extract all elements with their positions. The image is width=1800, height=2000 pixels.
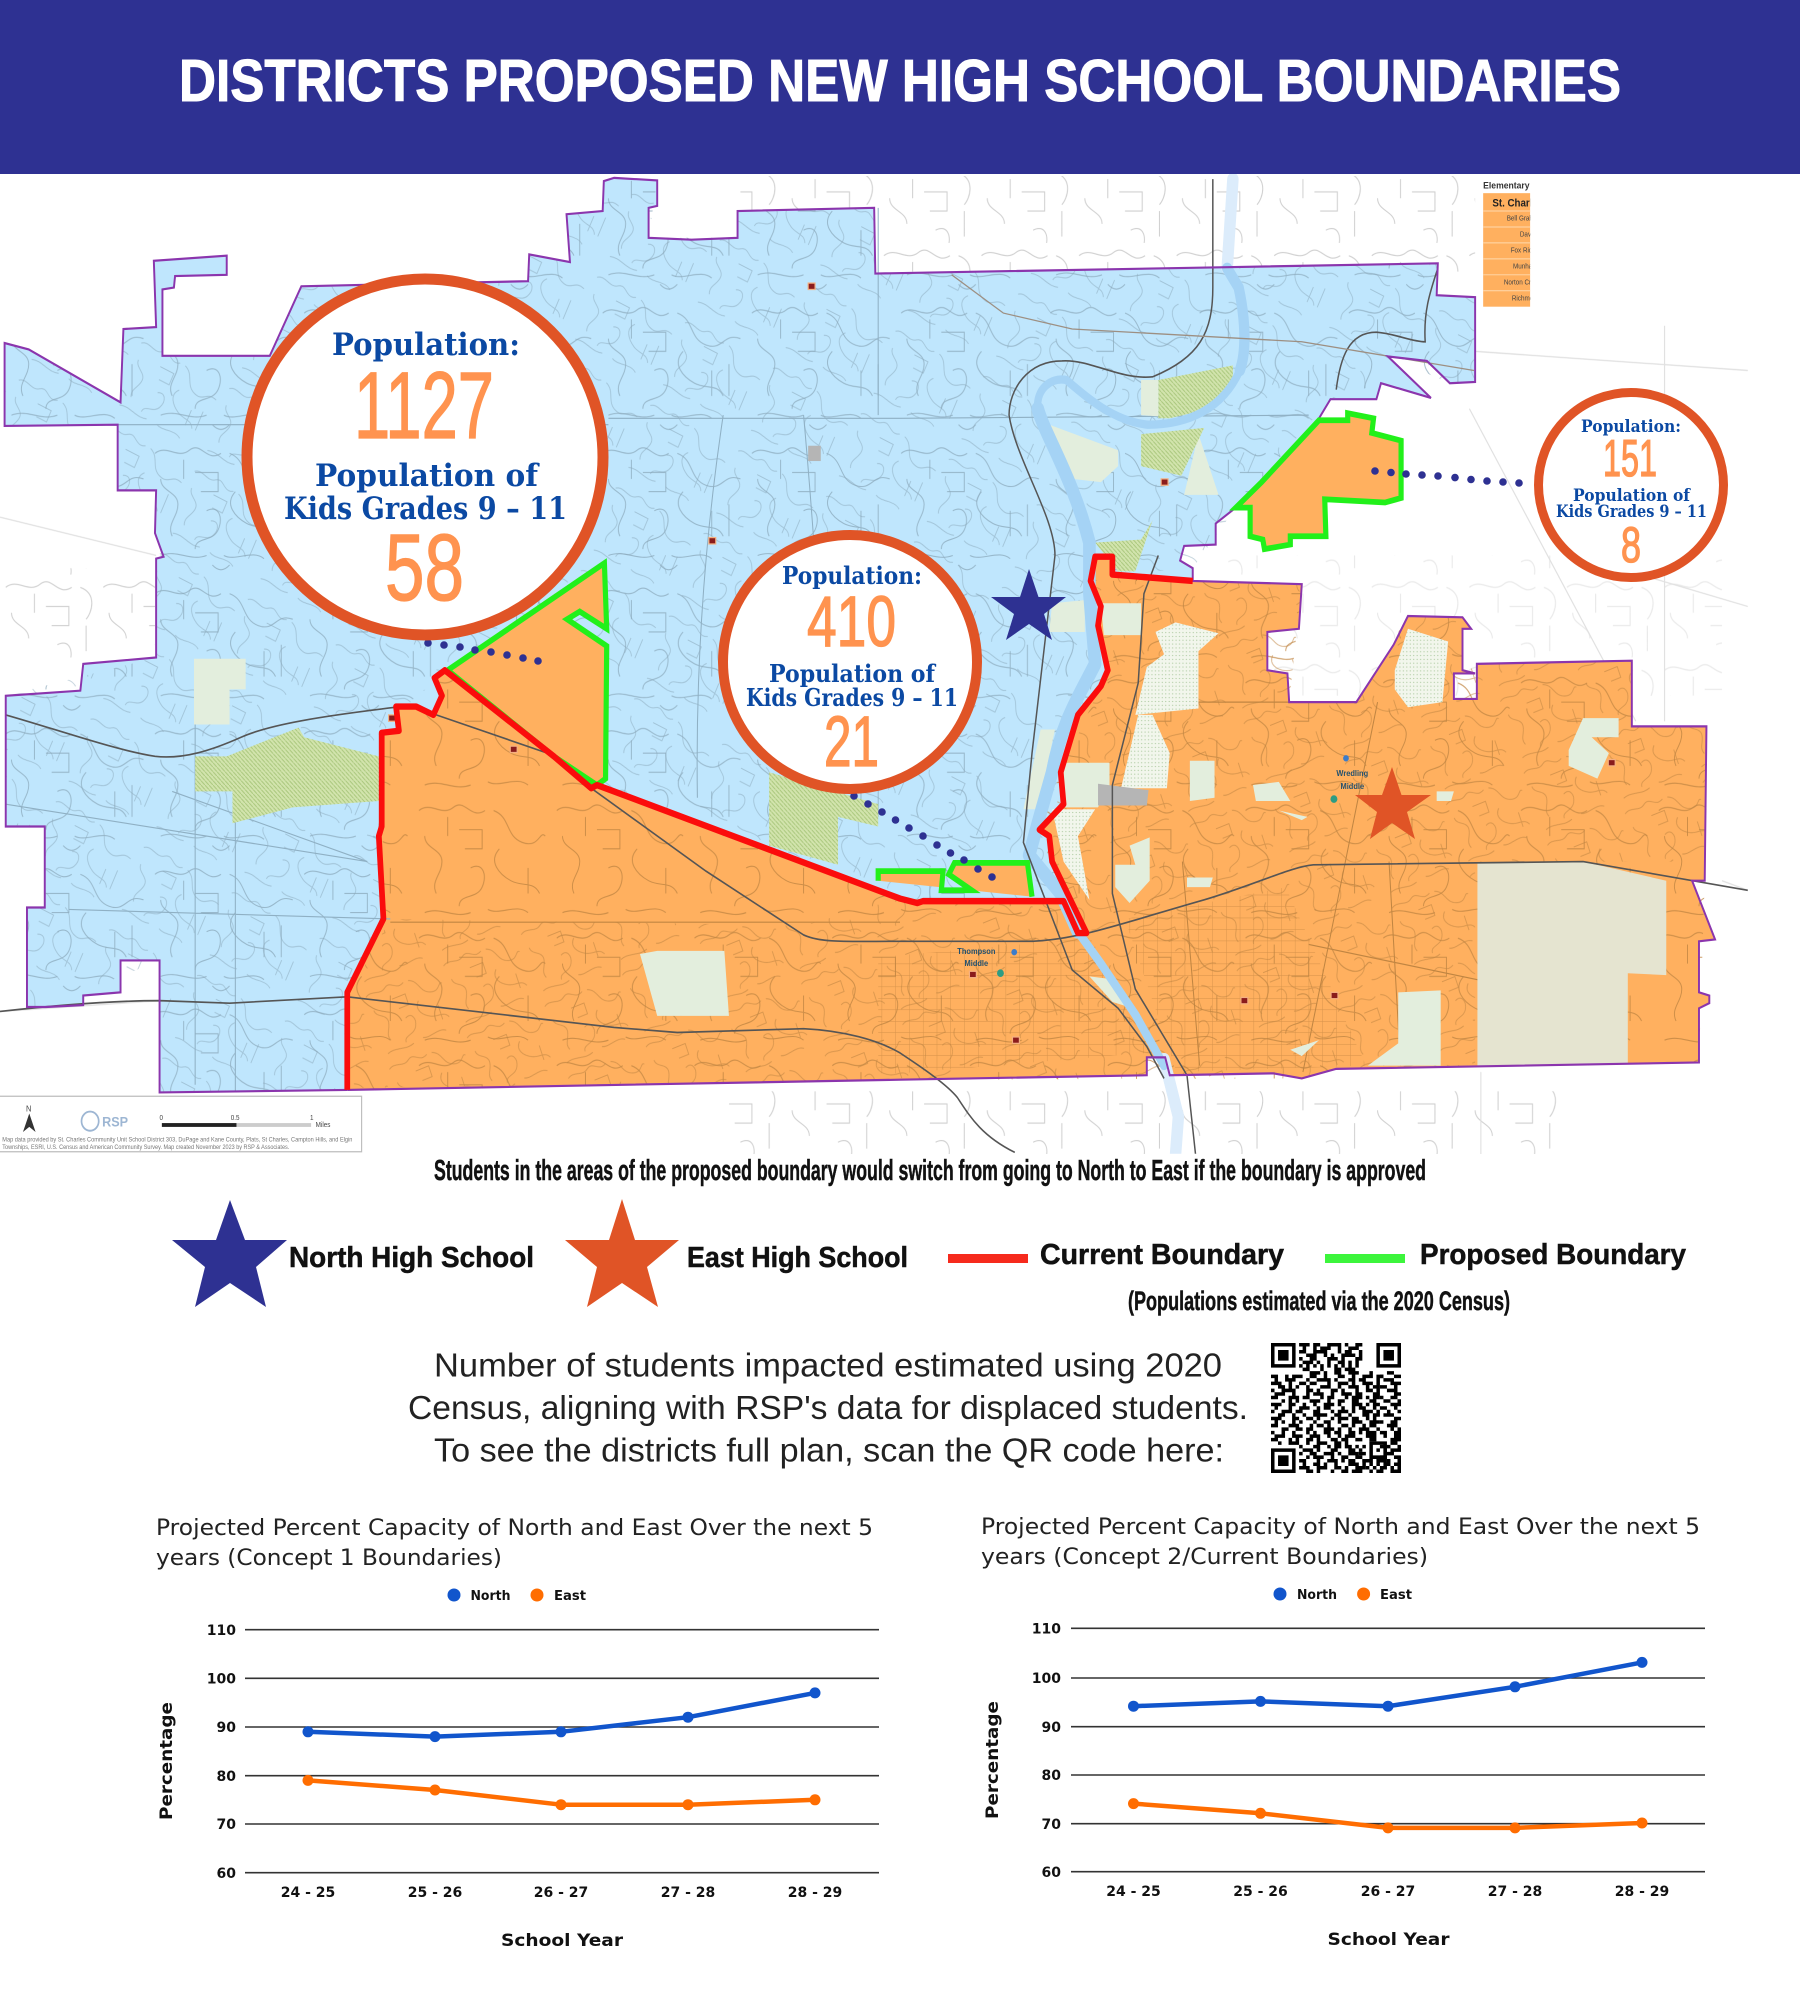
middle school labels: Middle: [965, 959, 989, 968]
map legend fragment: Norton Creek: [1504, 279, 1542, 286]
icon: East High School star on map: [1355, 767, 1431, 839]
chart: Concept 1 projected capacity: [156, 1515, 879, 1951]
map legend fragment: Davis: [1520, 231, 1536, 239]
scale bar: 1: [310, 1115, 314, 1122]
y axis labels: [1032, 1622, 1061, 1881]
x axis labels: 24 - 25: [281, 1885, 335, 1901]
chart title: years (Concept 2/Current Boundaries): [981, 1544, 1428, 1570]
map legend fragment: Richmond: [1512, 295, 1540, 302]
axis title: School Year: School Year: [1328, 1930, 1450, 1950]
map credit: [2, 1137, 352, 1151]
icon: navy star: [172, 1200, 287, 1307]
callout: central area population: Kids Grades 9 – 11: [746, 683, 958, 712]
x axis labels: [281, 1885, 842, 1901]
callout: east area population: 151: [1603, 430, 1657, 488]
callout: west area population: Population of: [315, 458, 540, 494]
x axis labels: 25 - 26: [1233, 1884, 1288, 1900]
chart legend: East: [554, 1589, 586, 1604]
callout: central area population: Population:: [782, 561, 922, 590]
y axis labels: [207, 1623, 236, 1882]
x axis labels: 28 - 29: [1615, 1884, 1669, 1900]
callout: west area population: 58: [385, 515, 464, 621]
legend swatch: current boundary: [948, 1254, 1028, 1263]
y axis labels: 70: [1042, 1817, 1061, 1833]
x axis labels: 27 - 28: [1488, 1884, 1542, 1900]
callout: central area population: [723, 535, 977, 789]
district map: east attendance area: [347, 557, 1715, 1090]
callout: east area population: Population:: [1581, 417, 1681, 437]
series: East: [302, 1775, 820, 1810]
RSP logo: [82, 1112, 128, 1131]
middle school labels: Middle: [1341, 782, 1365, 791]
callout: west area population: Kids Grades 9 – 11: [284, 491, 567, 527]
x axis labels: 24 - 25: [1106, 1884, 1161, 1900]
y axis labels: 60: [1042, 1865, 1061, 1881]
gridlines: [1071, 1628, 1705, 1872]
scale bar: 0.5: [231, 1115, 240, 1122]
chart legend: East: [1380, 1588, 1412, 1603]
map credit: Map data provided by St. Charles Community Unit School District 303, DuPage and Kane County, Plats, St Charles, Campton Hills, and Elgin: [2, 1137, 352, 1144]
map legend fragment: Bell Graham: [1507, 215, 1542, 223]
x axis labels: 25 - 26: [408, 1885, 462, 1901]
callout: east area population: Population of: [1573, 486, 1692, 506]
chart: Concept 2 projected capacity: [981, 1514, 1705, 1950]
legend label: North High School: North High School: [289, 1242, 534, 1274]
map legend fragment: Elementary Schools: [1483, 180, 1565, 191]
callout: west area population: [247, 279, 603, 635]
y axis labels: 80: [1042, 1768, 1061, 1784]
axis title: Percentage: Percentage: [157, 1702, 177, 1820]
text block: explanation: Census, aligning with RSP's data for displaced students.: [408, 1389, 1248, 1426]
y axis labels: 80: [217, 1769, 236, 1785]
map legend fragment: [1483, 182, 1530, 307]
callout: west area population: 1127: [354, 353, 494, 459]
y axis labels: 100: [207, 1672, 236, 1688]
census note: (Populations estimated via the 2020 Census): [1128, 1286, 1510, 1316]
river: [1029, 179, 1244, 1155]
callout: west area population: Population:: [332, 327, 520, 363]
highways and rail lines: [0, 179, 1748, 1155]
parks and open land: [194, 365, 1666, 1066]
middle school labels: [957, 755, 1368, 977]
callout: east area population: Kids Grades 9 – 11: [1556, 502, 1707, 522]
chart title: years (Concept 1 Boundaries): [156, 1545, 502, 1571]
legend label: Current Boundary: Current Boundary: [1040, 1239, 1284, 1271]
chart legend: [448, 1588, 586, 1604]
legend swatch: proposed boundary: [1325, 1254, 1405, 1263]
leader dots: west area: [424, 639, 542, 665]
icon: North High School star on map: [991, 569, 1066, 640]
icon: orange star: [565, 1199, 679, 1307]
text block: explanation: [408, 1346, 1248, 1468]
legend: [172, 1199, 1686, 1316]
chart title: Projected Percent Capacity of North and East Over the next 5: [981, 1514, 1700, 1540]
chart title: [156, 1515, 873, 1571]
text block: explanation: To see the districts full plan, scan the QR code here:: [434, 1432, 1224, 1468]
y axis labels: 110: [1032, 1622, 1061, 1638]
chart legend: [1274, 1588, 1412, 1603]
callout: central area population: 410: [807, 583, 896, 662]
x axis labels: 26 - 27: [534, 1885, 588, 1901]
scale bar: 0: [160, 1115, 163, 1122]
x axis labels: 28 - 29: [788, 1885, 842, 1901]
chart legend: North: [470, 1589, 510, 1604]
scale bar: [160, 1115, 330, 1127]
header banner: [0, 0, 1800, 174]
chart legend: North: [1297, 1588, 1337, 1603]
map legend fragment: St. Charles: [1492, 198, 1543, 210]
callout: east area population: 8: [1621, 517, 1641, 573]
middle school labels: Wredling: [1336, 769, 1368, 778]
x axis labels: 26 - 27: [1361, 1884, 1415, 1900]
RSP logo: RSP: [102, 1114, 128, 1129]
y axis labels: 100: [1032, 1671, 1061, 1687]
y axis labels: 60: [217, 1866, 236, 1882]
series: North: [1128, 1657, 1648, 1712]
chart title: Projected Percent Capacity of North and East Over the next 5: [156, 1515, 873, 1541]
scale bar box: [0, 1096, 362, 1152]
current boundary in red: [347, 557, 1193, 1090]
district map: north attendance area: [5, 178, 1475, 1092]
leader dots: central area: [850, 792, 996, 881]
proposed boundary areas in green: [448, 413, 1401, 897]
y axis labels: 110: [207, 1623, 236, 1639]
series: North: [302, 1687, 820, 1742]
x axis labels: 27 - 28: [661, 1885, 715, 1901]
gridlines: [245, 1630, 879, 1873]
panel: boundary map: [0, 176, 1748, 1155]
school markers: [389, 283, 1615, 1043]
map legend fragment: Fox Ridge: [1511, 247, 1540, 255]
x axis labels: [1106, 1884, 1669, 1900]
leader dots: east area: [1371, 467, 1523, 487]
current boundary: purple district outline: [5, 178, 1715, 1092]
series: East: [1128, 1798, 1648, 1833]
y axis labels: 90: [1042, 1720, 1061, 1736]
middle school labels: Thompson: [957, 947, 996, 956]
callout: central area population: Population of: [769, 659, 937, 688]
chart title: [981, 1514, 1700, 1570]
icon: QR code: [1271, 1343, 1401, 1473]
axis title: Percentage: Percentage: [983, 1701, 1003, 1819]
y axis labels: 70: [217, 1817, 236, 1833]
legend label: Proposed Boundary: Proposed Boundary: [1420, 1239, 1686, 1271]
map credit: Townships, ESRI, U.S. Census and American Community Survey. Map created November 2023 by RSP & Associates.: [2, 1145, 290, 1151]
north arrow: N: [26, 1104, 32, 1114]
axis title: School Year: School Year: [501, 1931, 624, 1951]
legend label: East High School: East High School: [687, 1242, 908, 1274]
scale bar: Miles: [316, 1122, 331, 1129]
north arrow: [23, 1104, 36, 1132]
callout: central area population: 21: [824, 703, 879, 782]
text block: explanation: Number of students impacted estimated using 2020: [434, 1346, 1222, 1384]
callout: east area population: [1538, 392, 1724, 578]
title: DISTRICTS PROPOSED NEW HIGH SCHOOL BOUNDARIES: [179, 48, 1621, 114]
y axis labels: 90: [217, 1720, 236, 1736]
map legend fragment: Munhall: [1513, 263, 1536, 271]
